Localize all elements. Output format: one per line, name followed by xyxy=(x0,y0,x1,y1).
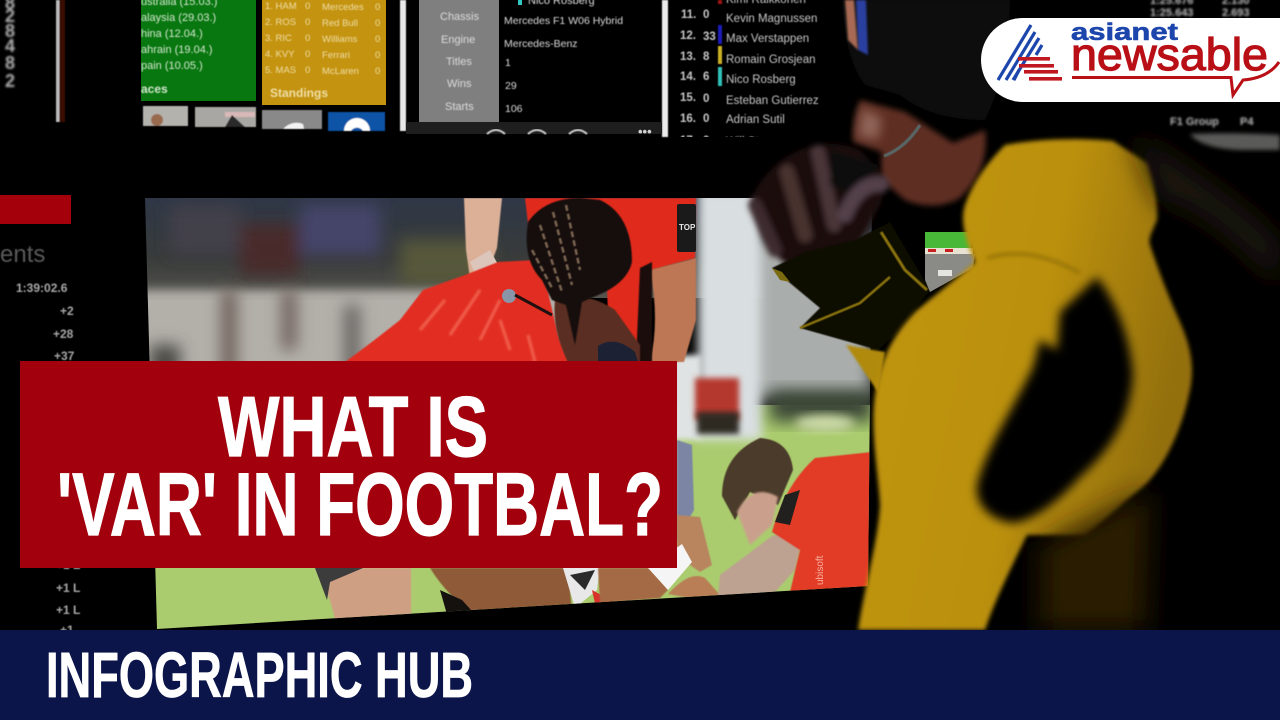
panel: driver results table: 16. xyxy=(680,113,696,125)
panel: left monitor lap times: 1:39:02.6 xyxy=(16,281,68,295)
panel: left monitor with timing list: 8 xyxy=(5,53,15,73)
panel: driver profile monitor: 106 xyxy=(505,103,523,115)
panel: green races tile xyxy=(141,0,256,101)
panel: left monitor lap times: +1 L xyxy=(56,558,80,572)
shoulder shadow on the right xyxy=(1130,130,1280,290)
panel: orange standings tile: 0 xyxy=(375,50,380,61)
panel: green races tile: ahrain (19.04.) xyxy=(141,44,213,56)
panel: driver results table: 0 xyxy=(703,113,709,125)
player with short hair, right xyxy=(718,438,872,597)
panel: driver results table: 13. xyxy=(680,51,696,63)
panel: orange standings tile: 0 xyxy=(305,33,310,44)
logo: asianet newsable: newsable xyxy=(1071,29,1268,80)
panel: orange standings tile: 5. MAS xyxy=(265,65,296,76)
jacket shadow xyxy=(977,277,1133,523)
title text: 'VAR' IN FOOTBAL? xyxy=(57,454,663,554)
panel: left monitor lap times: +1 L xyxy=(56,581,80,595)
panel: driver results table: 0 xyxy=(703,135,709,147)
panel: left monitor with timing list: 8 xyxy=(5,21,15,41)
panel: driver profile monitor: Engine xyxy=(441,34,475,46)
dark collar with yellow trim xyxy=(772,222,930,392)
panel: driver results table: 14. xyxy=(680,71,696,83)
panel: orange standings tile: Ferrari xyxy=(322,50,350,61)
panel: orange standings tile: 1. HAM xyxy=(265,1,297,12)
panel: driver profile monitor: Mercedes-Benz xyxy=(504,38,578,50)
panel: left monitor lap times: +1 L xyxy=(56,603,80,617)
logo: asianet newsable xyxy=(981,18,1280,102)
panel: driver results table: 15. xyxy=(680,92,696,104)
panel: far right timing monitor: P4 xyxy=(1240,116,1254,128)
small app tiles xyxy=(143,106,385,131)
panel: driver profile monitor: Starts xyxy=(445,101,474,113)
bottom band: Infographic Hub xyxy=(0,630,1280,720)
panel: orange standings tile: 0 xyxy=(375,34,380,45)
panel: driver profile monitor: Wins xyxy=(447,78,472,90)
panel: orange standings tile: 0 xyxy=(375,18,380,29)
panel: driver results table xyxy=(680,0,819,148)
panel: driver results table: 12. xyxy=(680,30,696,42)
rear player in red jersey: TOP xyxy=(679,223,696,232)
panel: green races tile: aces xyxy=(141,82,168,96)
panel: left monitor lap times: +1 xyxy=(60,623,74,637)
jacket crease xyxy=(987,254,1080,273)
title text xyxy=(57,380,663,554)
front player in red jersey with dreadlocks xyxy=(345,198,640,362)
panel: left monitor with timing list xyxy=(5,0,65,122)
panel: far right timing monitor: 2.693 xyxy=(1222,7,1250,19)
lower jacket in shadow xyxy=(1040,490,1150,630)
hand holding radio xyxy=(748,144,888,285)
panel: green races tile: pain (10.05.) xyxy=(141,60,203,72)
panel: driver results table: 0 xyxy=(703,93,709,105)
panel: orange standings tile: 0 xyxy=(305,65,310,76)
panel: left monitor lap times: +28 xyxy=(53,327,74,341)
panel: orange standings tile: Standings xyxy=(270,86,328,100)
panel: orange standings tile: 0 xyxy=(305,49,310,60)
player with short hair, right: ubisoft xyxy=(815,555,826,585)
speech bubble underline xyxy=(1072,62,1279,95)
panel: driver results table: 0 xyxy=(703,9,709,21)
face xyxy=(853,100,986,206)
nose highlight xyxy=(858,108,882,140)
panel: driver profile monitor: 1 xyxy=(505,57,511,69)
panel: driver results table: Kevin Magnussen xyxy=(726,13,817,25)
panel: driver results table: 8 xyxy=(703,51,710,63)
panel: orange standings tile: 0 xyxy=(305,1,310,12)
panel: orange standings tile: McLaren xyxy=(322,66,359,77)
panel: driver results table: Romain Grosjean xyxy=(726,54,815,66)
panel: far right timing monitor xyxy=(1150,0,1280,150)
logo: asianet newsable: asianet xyxy=(1071,19,1178,46)
panel: driver profile monitor xyxy=(400,0,668,139)
panel: far right timing monitor: F1 Group xyxy=(1170,116,1219,128)
panel: green races tile: hina (12.04.) xyxy=(141,28,203,40)
panel: main screen football photo xyxy=(135,190,875,630)
panel: orange standings tile: 3. RIC xyxy=(265,33,292,44)
headset microphone xyxy=(884,125,920,156)
panel: far right timing monitor: 1:25.643 xyxy=(1150,7,1193,19)
title box xyxy=(20,361,677,568)
referee figure in yellow jacket xyxy=(748,0,1280,630)
panel: driver profile monitor: Chassis xyxy=(440,11,480,23)
panel: driver profile monitor: Mercedes F1 W06 Hybrid xyxy=(504,15,623,27)
panel: green races tile: alaysia (29.03.) xyxy=(141,12,216,24)
helmet and headset xyxy=(842,0,1010,120)
panel: driver profile monitor: 29 xyxy=(505,80,517,92)
panel: orange standings tile: Red Bull xyxy=(322,18,358,29)
panel: orange standings tile: Williams xyxy=(322,34,358,45)
panel: driver results table: 33 xyxy=(703,31,716,43)
panel: left monitor lap times: +37 xyxy=(54,349,75,363)
title text: WHAT IS xyxy=(218,380,488,475)
panel: driver results table: 11. xyxy=(681,9,696,21)
panel: left monitor with timing list: 2 xyxy=(5,71,15,91)
bottom band: Infographic Hub: INFOGRAPHIC HUB xyxy=(46,639,473,711)
panel: driver profile monitor: ••• xyxy=(638,124,652,139)
panel: left monitor lap times: +2 xyxy=(60,304,74,318)
panel: driver results table: Nico Rosberg xyxy=(726,74,796,86)
yellow jacket xyxy=(858,139,1192,630)
panel: driver results table: Will Stevens xyxy=(726,136,790,148)
panel: orange standings tile: 0 xyxy=(375,2,380,13)
small monitor seen behind the neck xyxy=(925,232,975,292)
panel: orange standings tile: 2. ROS xyxy=(265,17,296,28)
rear player in red jersey xyxy=(464,198,696,362)
panel: driver results table: Esteban Gutierrez xyxy=(726,95,819,107)
panel: driver results table: 17. xyxy=(680,135,696,147)
icon: triangle mark xyxy=(998,25,1062,81)
panel: orange standings tile xyxy=(262,0,386,105)
panel: left monitor lap times xyxy=(0,195,80,637)
panel: orange standings tile: 4. KVY xyxy=(265,49,295,60)
panel: driver results table: Adrian Sutil xyxy=(726,114,785,126)
panel: left monitor with timing list: 4 xyxy=(5,36,15,56)
players on the ground, bottom centre xyxy=(315,440,720,630)
panel: left monitor lap times: ents xyxy=(0,241,45,268)
photo background: blurred stand and hoardings xyxy=(135,190,875,630)
panel: left monitor with timing list: 2 xyxy=(5,6,15,26)
panel: driver profile monitor: Titles xyxy=(446,56,472,68)
panel: driver results table: Max Verstappen xyxy=(726,33,809,45)
panel: orange standings tile: Mercedes xyxy=(322,2,364,13)
panel: driver results table: 6 xyxy=(703,71,709,83)
panel: orange standings tile: 0 xyxy=(305,17,310,28)
panel: orange standings tile: 0 xyxy=(375,66,380,77)
